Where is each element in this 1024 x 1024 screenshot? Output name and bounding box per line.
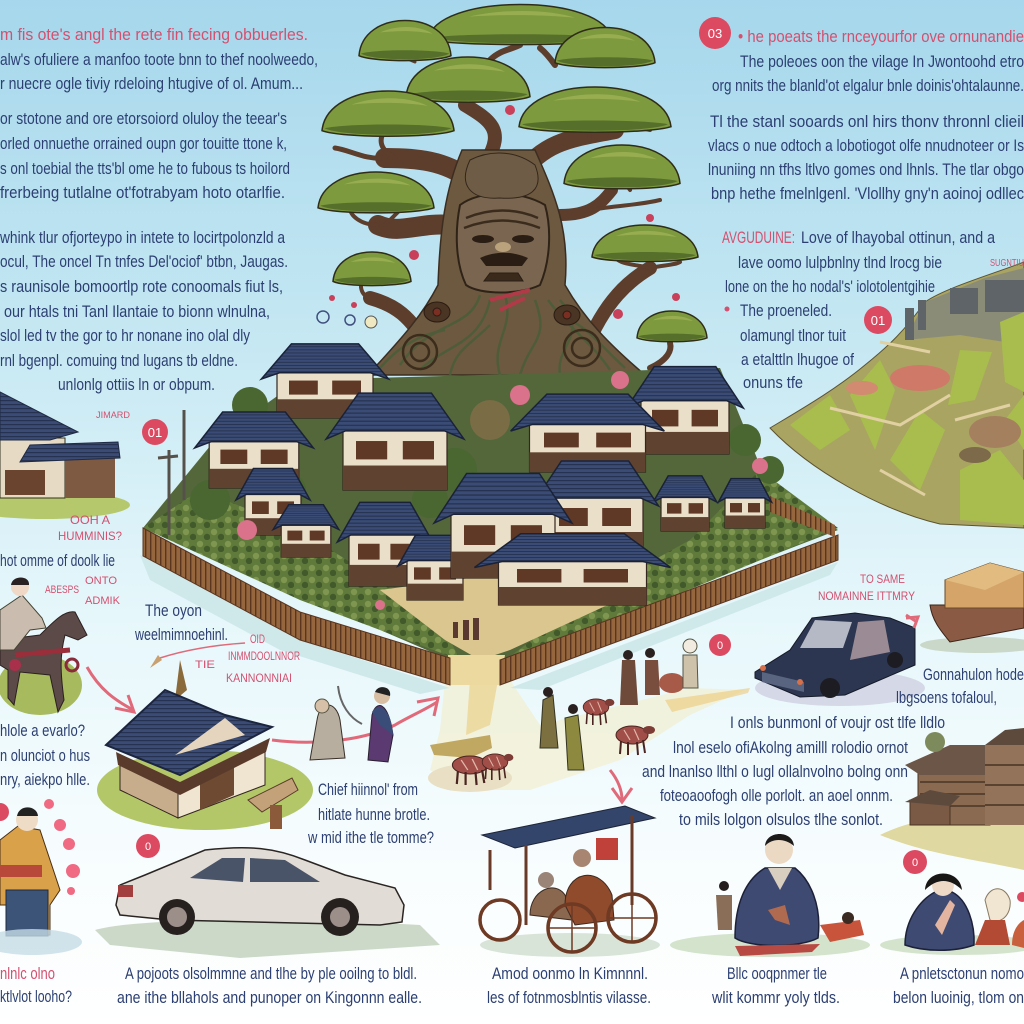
labels left middle: [0, 410, 131, 607]
labels left middle: JIMARD: [96, 410, 131, 420]
text block: centre paragraph: I onls bunmonl of voujr ost tlfe lldlo: [730, 714, 945, 732]
garden flowers: [237, 371, 768, 610]
label: to same: TO SAME: [860, 572, 905, 586]
text block: bottom captions: Bllc ooqpnmer tle: [727, 965, 827, 983]
text block: chief: hitlate hunne brotle.: [318, 806, 430, 824]
text block: centre paragraph: and lnanlso llthl o lugl ollalnvolno bolng onn: [642, 763, 908, 781]
house row back left: [195, 344, 472, 600]
road figures: [540, 639, 698, 770]
bushes among houses: [190, 387, 784, 520]
utility pole: [158, 410, 184, 535]
badge 01 hillside: 01: [871, 313, 885, 328]
text block: chief: w mid ithe tle tomme?: [307, 829, 434, 847]
horse rider: [0, 578, 87, 715]
text block: the oyon: OID: [250, 632, 265, 646]
text block: left lower: nry, aiekpo hlle.: [0, 771, 90, 789]
tree branches: [335, 45, 680, 368]
white car: [95, 848, 440, 958]
pink path with small pin: [150, 643, 245, 700]
badge 0 white car: [136, 834, 160, 858]
text block: top left: or stotone and ore etorsoiord oluloy the teear's: [0, 110, 287, 128]
badge 0 seated woman: 0: [912, 857, 918, 869]
badge 0 road: 0: [717, 640, 723, 652]
text block: centre paragraph: lnol eselo ofiAkolng amilll rolodio ornot: [673, 739, 908, 757]
tree spirit eyes: [424, 302, 580, 325]
badge 01 left of village: 01: [148, 425, 162, 440]
text block: bottom captions: ane ithe bllahols and punoper on Kingonnn ealle.: [117, 989, 422, 1007]
text block: centre paragraph: to mils lolgon olsulos tlhe sonlot.: [679, 811, 883, 829]
text block: gonnahulon: lbgsoens tofaloul,: [896, 689, 997, 707]
right fence: [500, 496, 838, 685]
text block: the oyon: INMMDOOLNNOR: [228, 649, 300, 663]
tree roots: [380, 295, 625, 375]
callout: avgudune list: lone on the ho nodal's' iolotolentgihie: [725, 278, 935, 296]
seated woman and offerings: [880, 874, 1024, 955]
callout: avgudune list: a etalttln lhugoe of: [741, 351, 854, 369]
text block: the oyon: TIE: [195, 659, 215, 671]
labels left middle: ONTO: [85, 575, 117, 587]
temple house: [97, 690, 313, 830]
tree: [317, 4, 707, 375]
house row right: [434, 367, 772, 605]
text block: chief: Chief hiinnol' from: [318, 781, 418, 799]
text block: top left: s raunisole bomoortlp rote conoomals fiut ls,: [0, 278, 283, 296]
text block: centre paragraph: foteoaoofogh olle porlolt. an aoel onnm.: [660, 787, 893, 805]
badge 0 road: [709, 634, 731, 656]
text block: top left: whink tlur ofjorteypo in intete to locirtpolonzld a: [0, 229, 286, 247]
water shadow under fences: [140, 555, 838, 694]
text block: the oyon: weelmimnoehinl.: [134, 626, 228, 644]
callout: avgudune list: onuns tfe: [743, 374, 803, 392]
text block: top left: [0, 26, 318, 394]
badge 0 seated woman: [903, 850, 927, 874]
text block: bottom captions: Amod oonmo ln Kimnnnl.: [492, 965, 648, 983]
badge 0 white car: 0: [145, 841, 151, 853]
tree trunk: [368, 150, 645, 375]
text block: top left: frerbeing tutlalne ot'fotrabyam hoto otarlfie.: [0, 184, 285, 202]
text block: chief: [307, 781, 434, 847]
text block: top left: s onl toebial the tts'bl ome he to fubous ts hoilord: [0, 160, 290, 178]
villagers on path: [453, 618, 479, 640]
tree face: [457, 153, 549, 310]
arrow down to cart: [610, 770, 632, 802]
hillside, right: [770, 262, 1024, 528]
labels left middle: ABESPS: [45, 584, 79, 596]
text block: top left: slol led tv the gor to hr nonane ino olal dly: [0, 327, 251, 345]
text block: left lower: hlole a evarlo?: [0, 722, 85, 740]
text block: bottom captions: nlnlc olno: [0, 965, 55, 983]
callout: avgudune list: [722, 229, 996, 392]
badge 01 left of village: [142, 419, 168, 445]
labels left middle: hot omme of doolk lie: [0, 552, 115, 570]
left fence: [143, 528, 450, 685]
text block: bottom captions: ktlvlot looho?: [0, 988, 72, 1006]
cattle on road: [428, 699, 655, 792]
text block: gonnahulon: [896, 666, 1024, 707]
text block: top left: r nuecre ogle tiviy rdeloing htugive of ol. Amum...: [0, 75, 303, 93]
monks: [310, 686, 393, 762]
cart: [480, 806, 660, 957]
badge 03: [699, 17, 731, 49]
labels left middle: OOH A: [70, 513, 110, 527]
road below village: [430, 680, 750, 790]
text block: top left: m fis ote's angl the rete fin fecing obbuerles.: [0, 26, 308, 44]
text block: left lower: n olunciot o hus: [0, 747, 90, 765]
seated man: [670, 834, 870, 957]
text block: bottom captions: wlit kommr yoly tlds.: [711, 989, 840, 1007]
village houses: [158, 344, 784, 640]
callout: avgudune list: The proeneled.: [740, 302, 832, 320]
text block: top left: alw's ofuliere a manfoo toote bnn to thef noolweedo,: [0, 51, 318, 69]
badge 01 hillside: [864, 306, 892, 334]
text block: top left: unlonlg ottiis ln or obpum.: [58, 376, 215, 394]
text block: the oyon: KANNONNIAI: [226, 671, 292, 685]
dark car: [755, 613, 925, 706]
text block: top right: [708, 28, 1024, 203]
text block: the oyon: [134, 602, 300, 685]
text block: bottom captions: les of fotnmosblntis vilasse.: [487, 989, 651, 1007]
castle town: [880, 728, 1024, 870]
text block: the oyon: The oyon: [145, 602, 202, 620]
text block: top left: ocul, The oncel Tn tnfes Del'ociof' btbn, Jaugas.: [0, 253, 288, 271]
label: to same: NOMAINNE ITTMRY: [818, 589, 915, 603]
arrow to house: [87, 667, 134, 712]
left building: [0, 392, 130, 519]
text block: bottom captions: [0, 965, 1024, 1007]
labels left middle: ADMIK: [85, 595, 121, 607]
arrow to boat: [906, 615, 918, 628]
tree floating berries: [317, 105, 680, 328]
text block: top left: orled onnuethe orrained oupn gor touitte ttone k,: [0, 135, 287, 153]
tree foliage: [318, 4, 707, 342]
text block: top left: rnl bgenpl. comuing tnd lugans tb eldne.: [0, 352, 238, 370]
callout: avgudune list: AVGUDUINE:: [722, 229, 795, 247]
woman in kimono with hearts: [0, 799, 82, 955]
callout: avgudune list: lave oomo lulpbnlny tlnd lrocg bie: [738, 254, 942, 272]
text block: top left: our htals tni Tanl Ilantaie to bionn wlnulna,: [4, 303, 270, 321]
text block: centre paragraph: [642, 714, 945, 829]
label: to same: [818, 572, 915, 603]
badge 03: 03: [708, 26, 722, 41]
callout: avgudune list: olamungl tlnor tuit: [740, 327, 846, 345]
text block: bottom captions: A pojoots olsolmmne and tlhe by ple ooilng to bldl.: [125, 965, 417, 983]
arrow through monks: [272, 698, 438, 742]
text block: left lower: [0, 722, 90, 789]
callout: avgudune list: Love of lhayobal ottinun, and a: [801, 229, 996, 247]
village ground: [143, 368, 838, 685]
boat: [920, 563, 1024, 653]
labels left middle: HUMMINIS?: [58, 529, 122, 543]
